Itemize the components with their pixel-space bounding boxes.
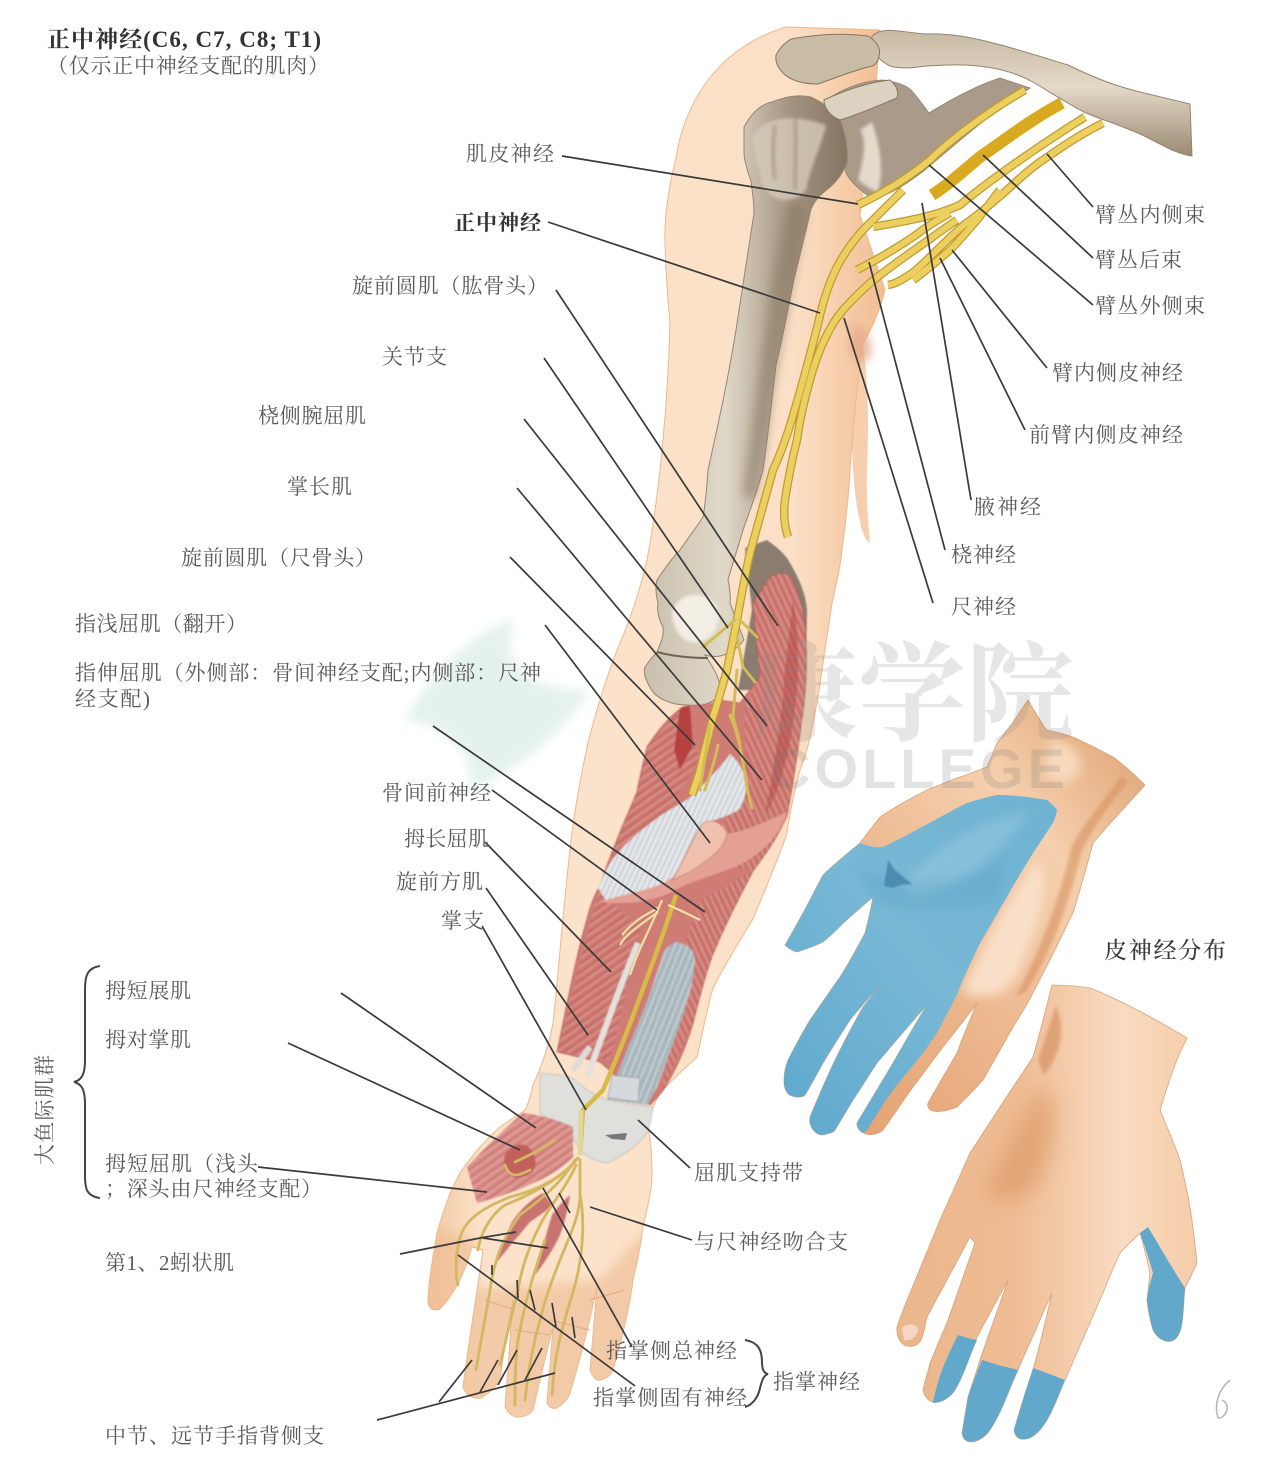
watermark <box>750 637 1074 800</box>
lower median nerve <box>580 895 676 1155</box>
palm crease dark mark <box>884 860 912 888</box>
acromion <box>776 34 880 84</box>
palm pale thenar patch <box>962 860 1044 996</box>
watermark cjk: 康学院 <box>750 637 1074 756</box>
label: lumbricals: 第1、2蚓状肌 <box>105 1251 234 1275</box>
label: palmar branch: 掌支 <box>441 909 484 933</box>
label: flexor pollicis brevis <box>105 1152 322 1201</box>
humeral head detail <box>752 118 826 200</box>
muscle mass base <box>557 573 806 1105</box>
nerves: hand <box>456 1140 583 1405</box>
wrist tendon blocks <box>608 1075 640 1102</box>
anterior interosseous branches <box>620 900 700 975</box>
upper arm inner shading <box>850 322 871 362</box>
label: ulnar nerve: 尺神经 <box>951 595 1016 619</box>
elbow condyle highlight <box>672 595 719 643</box>
label: cutaneous innervation: 皮神经分布 <box>1104 938 1226 963</box>
deep red strip pronator <box>674 706 693 770</box>
label: pronator teres ulnar head: 旋前圆肌（尺骨头） <box>181 546 376 570</box>
label: flexor pollicis brevis: 拇短屈肌（浅头 <box>105 1152 259 1176</box>
title: 正中神经(C6, C7, C8; T1) <box>47 27 321 52</box>
label: median nerve: 正中神经 <box>454 211 542 235</box>
lumbrical one <box>497 1193 552 1262</box>
watermark college: COLLEGE <box>770 737 1065 800</box>
label: flexor retinaculum: 屈肌支持带 <box>694 1161 803 1185</box>
reflected superficial flexor <box>600 812 787 903</box>
forearm muscles <box>557 540 807 1105</box>
central aponeurosis white <box>598 754 747 902</box>
label: radial nerve: 桡神经 <box>951 543 1016 567</box>
label: pronator quadratus: 旋前方肌 <box>396 870 483 894</box>
short wrist tendon <box>573 1047 590 1070</box>
muscle fibres distal <box>662 871 753 1092</box>
label: dorsal digital branches: 中节、远节手指背侧支 <box>105 1424 324 1448</box>
palm blue lower shade <box>855 852 1008 911</box>
distal long tendons grey <box>607 942 695 1105</box>
watermark swirl logo <box>405 618 590 790</box>
label: common palmar digital: 指掌侧总神经 <box>606 1339 737 1363</box>
signature mark <box>1216 1380 1230 1418</box>
flexor retinaculum <box>540 1073 653 1163</box>
skin fold strip <box>852 325 870 543</box>
label: pronator teres humeral head: 旋前圆肌（肱骨头） <box>352 274 548 298</box>
nerve fill <box>692 90 1103 795</box>
palm wrist pale patch <box>1045 740 1081 783</box>
elbow joint line <box>657 652 708 658</box>
fingers tint <box>425 1225 650 1420</box>
palm skin <box>784 700 1145 1135</box>
muscle fibres medial <box>557 707 700 1060</box>
dorsal hand skin <box>897 985 1197 1442</box>
thenar group brace <box>74 966 100 1198</box>
label: axillary nerve: 腋神经 <box>974 495 1041 519</box>
digital nerves brace <box>745 1340 768 1407</box>
blue: ring fingertip <box>933 1335 977 1403</box>
median nerve pale section <box>580 1110 581 1155</box>
label: lateral cord: 臂丛外侧束 <box>1095 294 1205 318</box>
panel: dorsal hand sensory map <box>897 985 1197 1442</box>
lumbrical two <box>535 1195 570 1275</box>
muscle fibres lateral <box>700 573 806 871</box>
finger creases <box>485 1290 625 1335</box>
posterior cord <box>932 103 1062 195</box>
panel: palm sensory map <box>784 700 1145 1135</box>
label: medial cord: 臂丛内侧束 <box>1095 203 1205 227</box>
blue: middle fingertip <box>962 1360 1018 1442</box>
label: abductor pollicis brevis: 拇短展肌 <box>105 979 191 1003</box>
muscle deep red edge <box>765 600 798 815</box>
label: flexor digitorum profundus: 经支配) <box>75 687 150 711</box>
label: posterior cord: 臂丛后束 <box>1095 248 1182 272</box>
coracoid <box>824 80 898 120</box>
dorsal shading <box>985 1085 1055 1200</box>
label: articular branch: 关节支 <box>382 345 447 369</box>
palm edge shadow <box>1016 776 1128 996</box>
label: flexor digitorum superficialis: 指浅屈肌（翻开） <box>75 612 247 636</box>
humerus <box>644 96 847 706</box>
label: palmar digital nerves: 指掌神经 <box>773 1370 860 1394</box>
label: musculocutaneous nerve: 肌皮神经 <box>466 142 554 166</box>
arm skin silhouette <box>428 27 885 1417</box>
blue: thumb <box>1140 1227 1185 1341</box>
grey shadow around muscle top <box>738 540 807 690</box>
nerve outline <box>692 90 1103 795</box>
panel: arm dissection <box>425 27 1192 1420</box>
blue: index fingertip <box>1014 1368 1065 1439</box>
label: medial antebrachial cutaneous: 前臂内侧皮神经 <box>1029 423 1183 447</box>
dorsal wrist shading <box>1038 1005 1061 1075</box>
clavicle <box>872 30 1192 156</box>
thenar muscles <box>467 1113 573 1275</box>
label: flexor digitorum profundus: 指伸屈肌（外侧部：骨间神经支配;内侧部：尺神 <box>75 661 541 685</box>
opponens dark patch <box>504 1144 536 1178</box>
label: flexor pollicis longus: 拇长屈肌 <box>404 827 489 851</box>
nerves: brachial plexus <box>580 90 1103 1155</box>
label: anterior interosseous: 骨间前神经 <box>382 781 491 805</box>
humeral head dark grooves <box>773 118 796 190</box>
shaft shadow <box>742 200 806 500</box>
label: flexor digitorum profundus <box>75 661 541 711</box>
elbow median branches <box>700 620 757 808</box>
label: palmaris longus: 掌长肌 <box>287 475 352 499</box>
flexor pollicis tendon white <box>587 943 638 1077</box>
leader lines <box>258 154 1093 1420</box>
label: flexor carpi radialis: 桡侧腕屈肌 <box>258 404 366 428</box>
glenoid highlight <box>858 122 881 192</box>
palm blue highlights <box>900 812 1030 900</box>
label: flexor pollicis brevis: ；深头由尺神经支配） <box>105 1177 322 1201</box>
label: anastomotic branch: 与尺神经吻合支 <box>694 1230 848 1254</box>
small fingernail <box>902 1324 918 1340</box>
label: proper palmar digital: 指掌侧固有神经 <box>593 1386 747 1410</box>
subtitle: （仅示正中神经支配的肌肉） <box>47 54 329 78</box>
scapula <box>829 78 1030 199</box>
label: medial brachial cutaneous: 臂内侧皮神经 <box>1052 361 1183 385</box>
label: thenar group: 大鱼际肌群 <box>33 1055 57 1165</box>
retinaculum dark slit <box>605 1133 627 1140</box>
label: opponens pollicis: 拇对掌肌 <box>105 1028 191 1052</box>
palm blue area <box>784 795 1057 1135</box>
